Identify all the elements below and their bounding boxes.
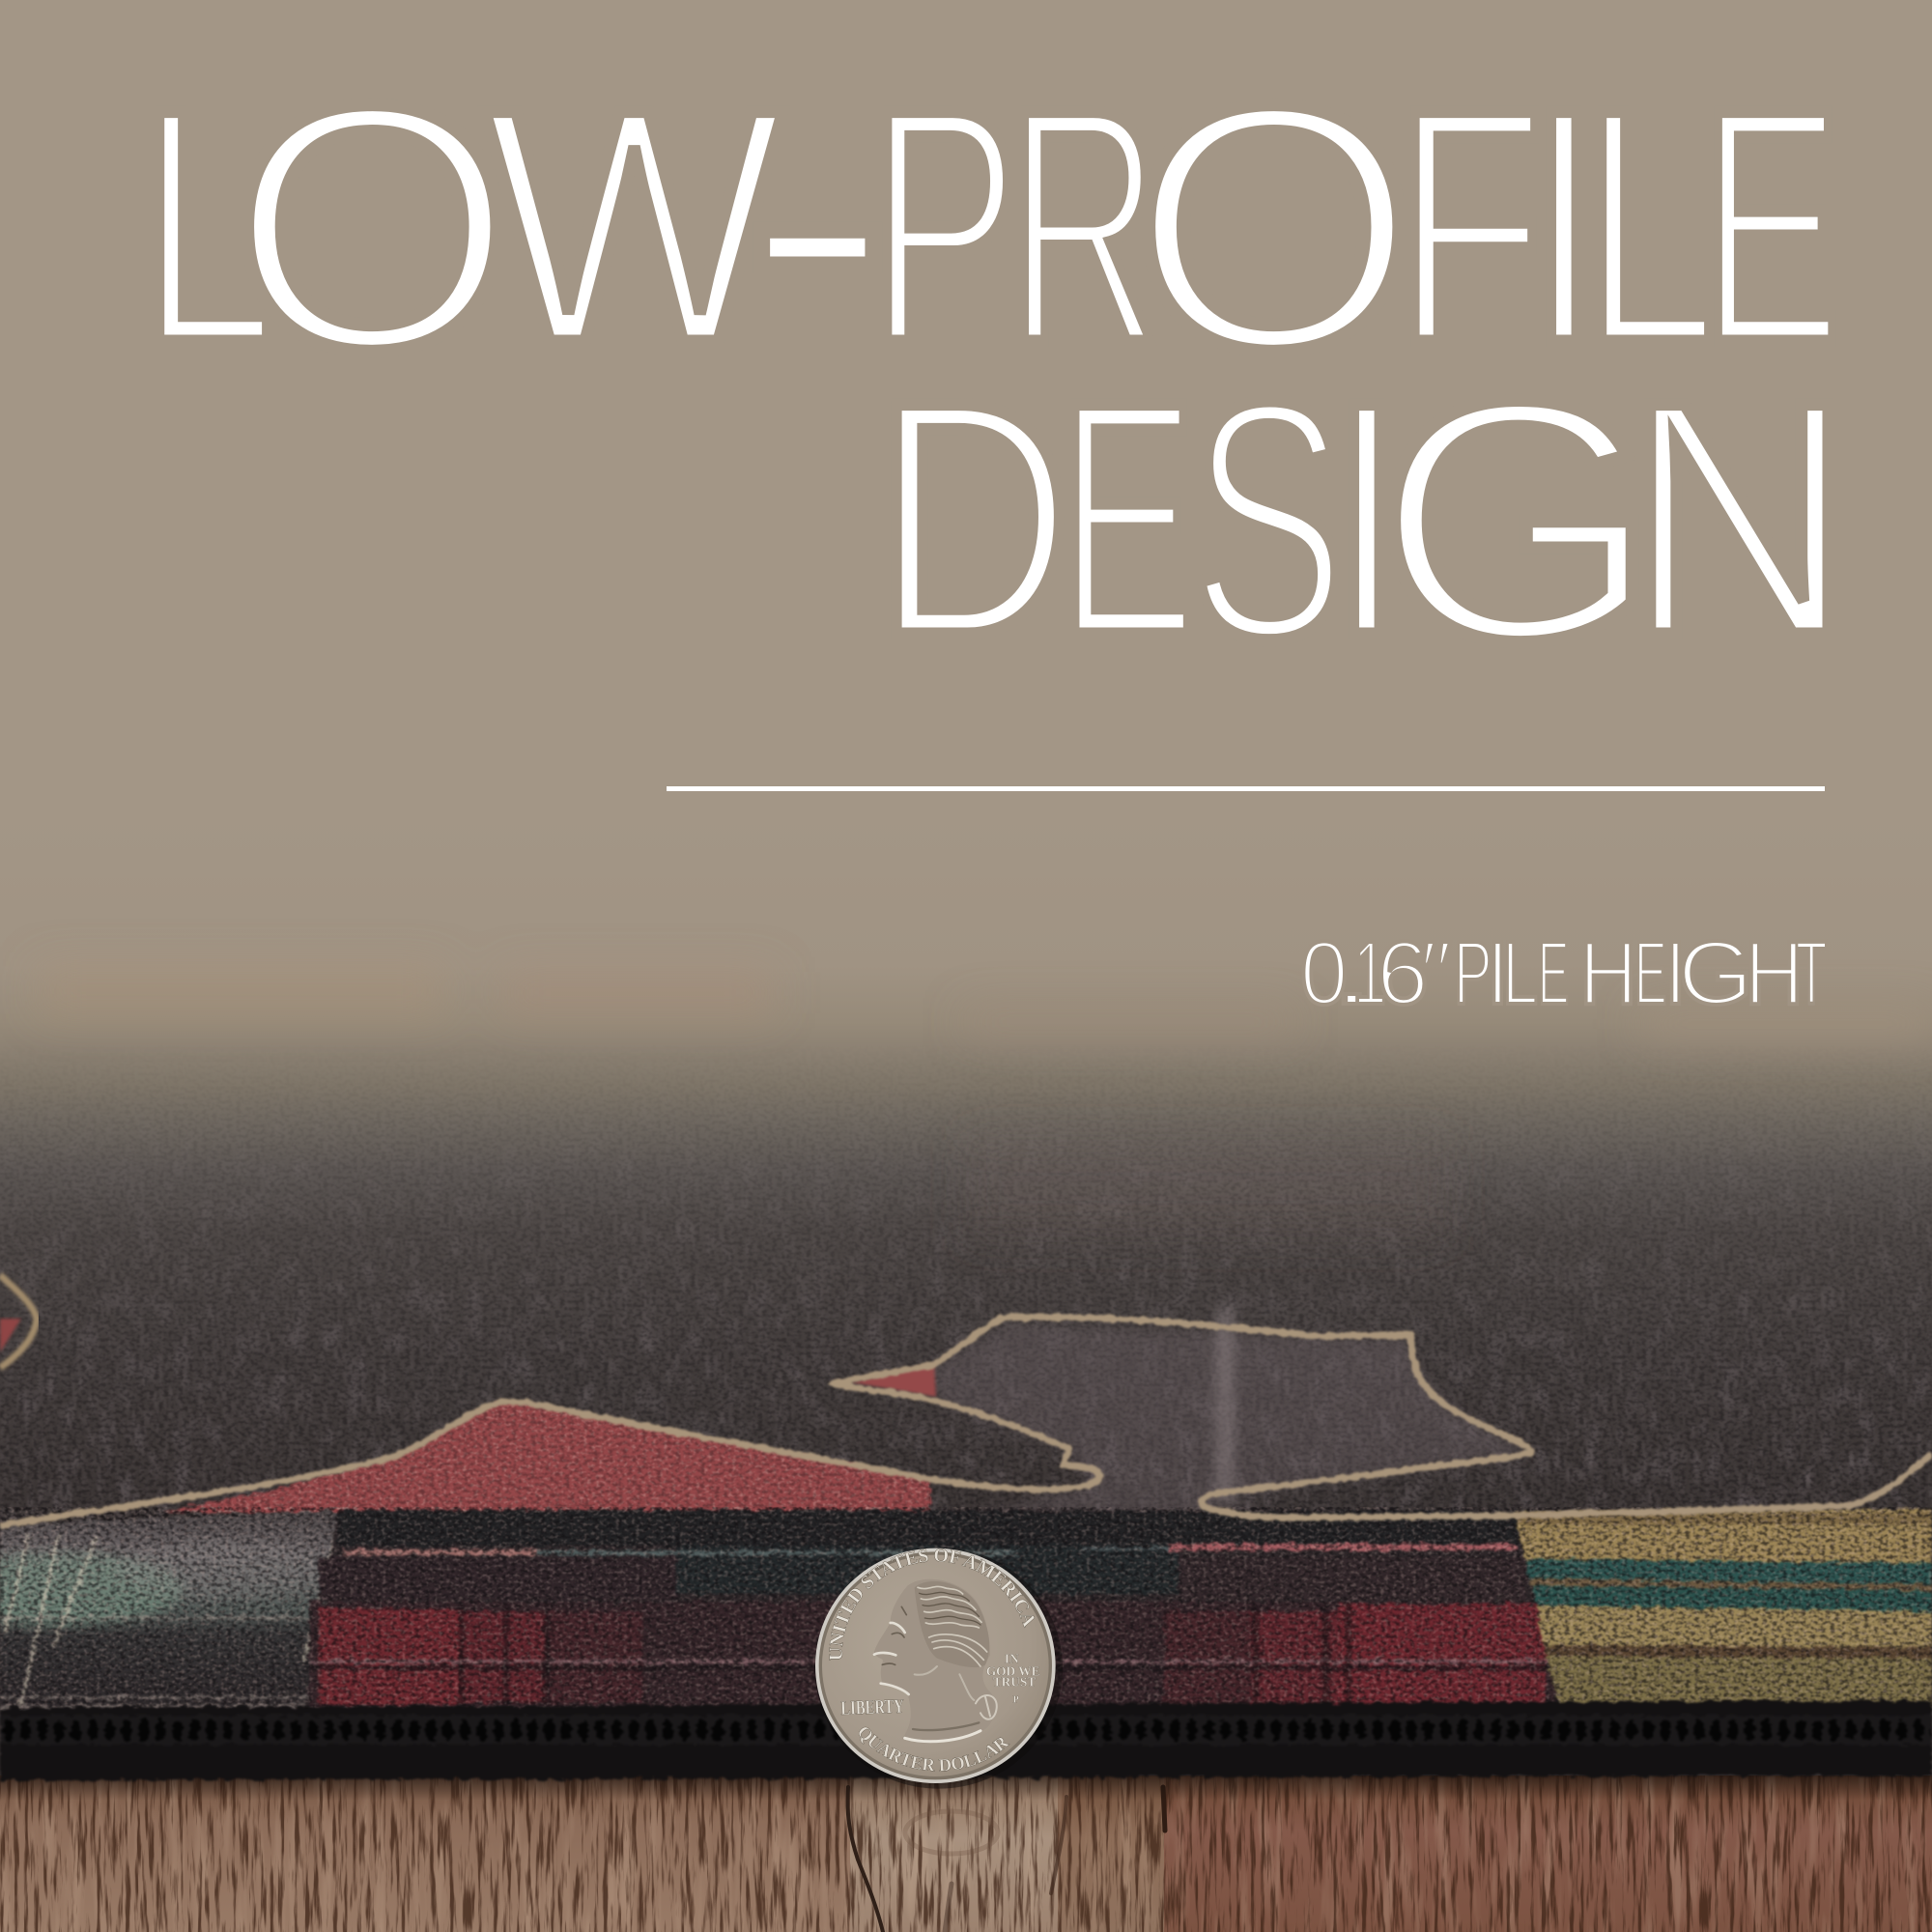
text: I (1526, 41, 1601, 412)
pale vertical streak (1215, 1309, 1235, 1502)
quarter dollar coin: UNITED STATES OF AMERICA (829, 1548, 1035, 1661)
text: L (1582, 41, 1717, 412)
coin text LIBERTY: LIBERTY (840, 1696, 904, 1719)
text: P (1454, 923, 1492, 1023)
coin legend top (842, 1561, 1028, 1661)
text: L (1502, 923, 1538, 1023)
patchwork: centre red and black plaid (304, 1510, 1560, 1710)
coin motto: GOD WE (986, 1664, 1040, 1679)
text: I (1487, 923, 1508, 1023)
divider rule (667, 786, 1825, 791)
patchwork: left plaid square (0, 1510, 345, 1710)
rug black bound edge (0, 1700, 1932, 1780)
text: I (1329, 333, 1404, 705)
subheading: pile height (1300, 923, 1827, 1023)
wood cracks and knot (847, 1787, 1165, 1932)
far left motif outline (0, 1275, 37, 1368)
text: H (1745, 923, 1804, 1023)
far left red motif (0, 1319, 21, 1352)
text: . (1331, 923, 1372, 1023)
title: LOW-PROFILE DESIGN (140, 0, 1854, 712)
text: O (230, 34, 514, 423)
text: G (1678, 923, 1752, 1023)
far lighter panel of the rug pattern (936, 1325, 1531, 1517)
text: O (1131, 34, 1417, 423)
patchwork: right gold and green stripes (1515, 1509, 1932, 1708)
wood floor (0, 1776, 1932, 1932)
rug pile texture over the patchwork (0, 1507, 1932, 1710)
text: E (1634, 923, 1666, 1023)
text: 1 (1353, 923, 1386, 1023)
patchwork panels (0, 1509, 1932, 1710)
text: N (1624, 333, 1854, 705)
tan outline of the rug motif (0, 1317, 1932, 1525)
text: D (874, 333, 1072, 705)
blurred background tints (39, 966, 1932, 1236)
text: W (484, 41, 784, 412)
text: L (140, 41, 274, 412)
text: ″ (1420, 923, 1452, 1023)
text: F (1395, 41, 1546, 412)
text: T (1795, 923, 1827, 1023)
text: G (1376, 330, 1660, 712)
Washington portrait (874, 1579, 997, 1743)
text: P (869, 41, 1018, 412)
text: 6 (1376, 923, 1428, 1023)
text: 0 (1300, 923, 1348, 1023)
coin rim (815, 1548, 1056, 1783)
coin face (822, 1555, 1049, 1776)
quarter dollar coin (815, 1548, 1063, 1789)
coin motto (986, 1652, 1040, 1706)
text: I (1664, 923, 1686, 1023)
coin legend bottom (857, 1729, 1023, 1771)
red triangle motif (155, 1401, 937, 1517)
text: R (1008, 41, 1160, 412)
text: E (1538, 923, 1569, 1023)
text: S (1191, 331, 1345, 709)
rug field texture (0, 1118, 1932, 1714)
coin motto: IN (1005, 1652, 1019, 1666)
text: E (1059, 333, 1196, 705)
quarter dollar coin: QUARTER DOLLAR (859, 1727, 1010, 1772)
small red triangle motif (850, 1364, 936, 1397)
coin motto: TRUST (993, 1675, 1036, 1690)
text: E (1701, 41, 1840, 412)
coin motto: P (1013, 1695, 1019, 1706)
text: H (1579, 923, 1636, 1023)
